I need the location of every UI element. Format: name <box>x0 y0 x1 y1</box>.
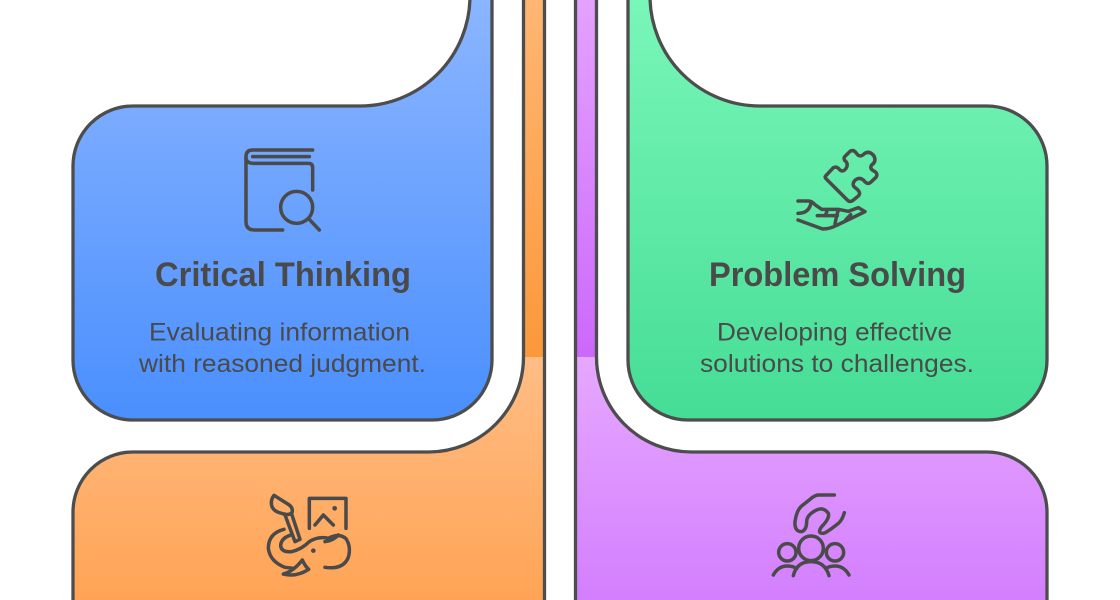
panel: collaboration <box>575 0 1047 600</box>
text: problem solving description <box>700 318 974 378</box>
heading: critical thinking: Critical Thinking <box>155 256 411 294</box>
icon: book with magnifier <box>246 150 319 230</box>
icon: hand with puzzle piece <box>798 151 877 229</box>
text: critical thinking description <box>138 318 426 378</box>
panel: problem solving <box>628 0 1047 420</box>
icon: hand over group of people <box>773 495 849 576</box>
icon: brush, picture and elephant <box>268 495 349 575</box>
panel: creativity <box>73 0 545 600</box>
text: problem solving description: Developing effective <box>717 318 952 346</box>
text: critical thinking description: with reasoned judgment. <box>138 350 426 378</box>
text: problem solving description: solutions to challenges. <box>700 350 974 378</box>
panel: critical thinking <box>73 0 492 420</box>
text: critical thinking description: Evaluating information <box>149 318 410 346</box>
heading: problem solving: Problem Solving <box>709 256 966 294</box>
